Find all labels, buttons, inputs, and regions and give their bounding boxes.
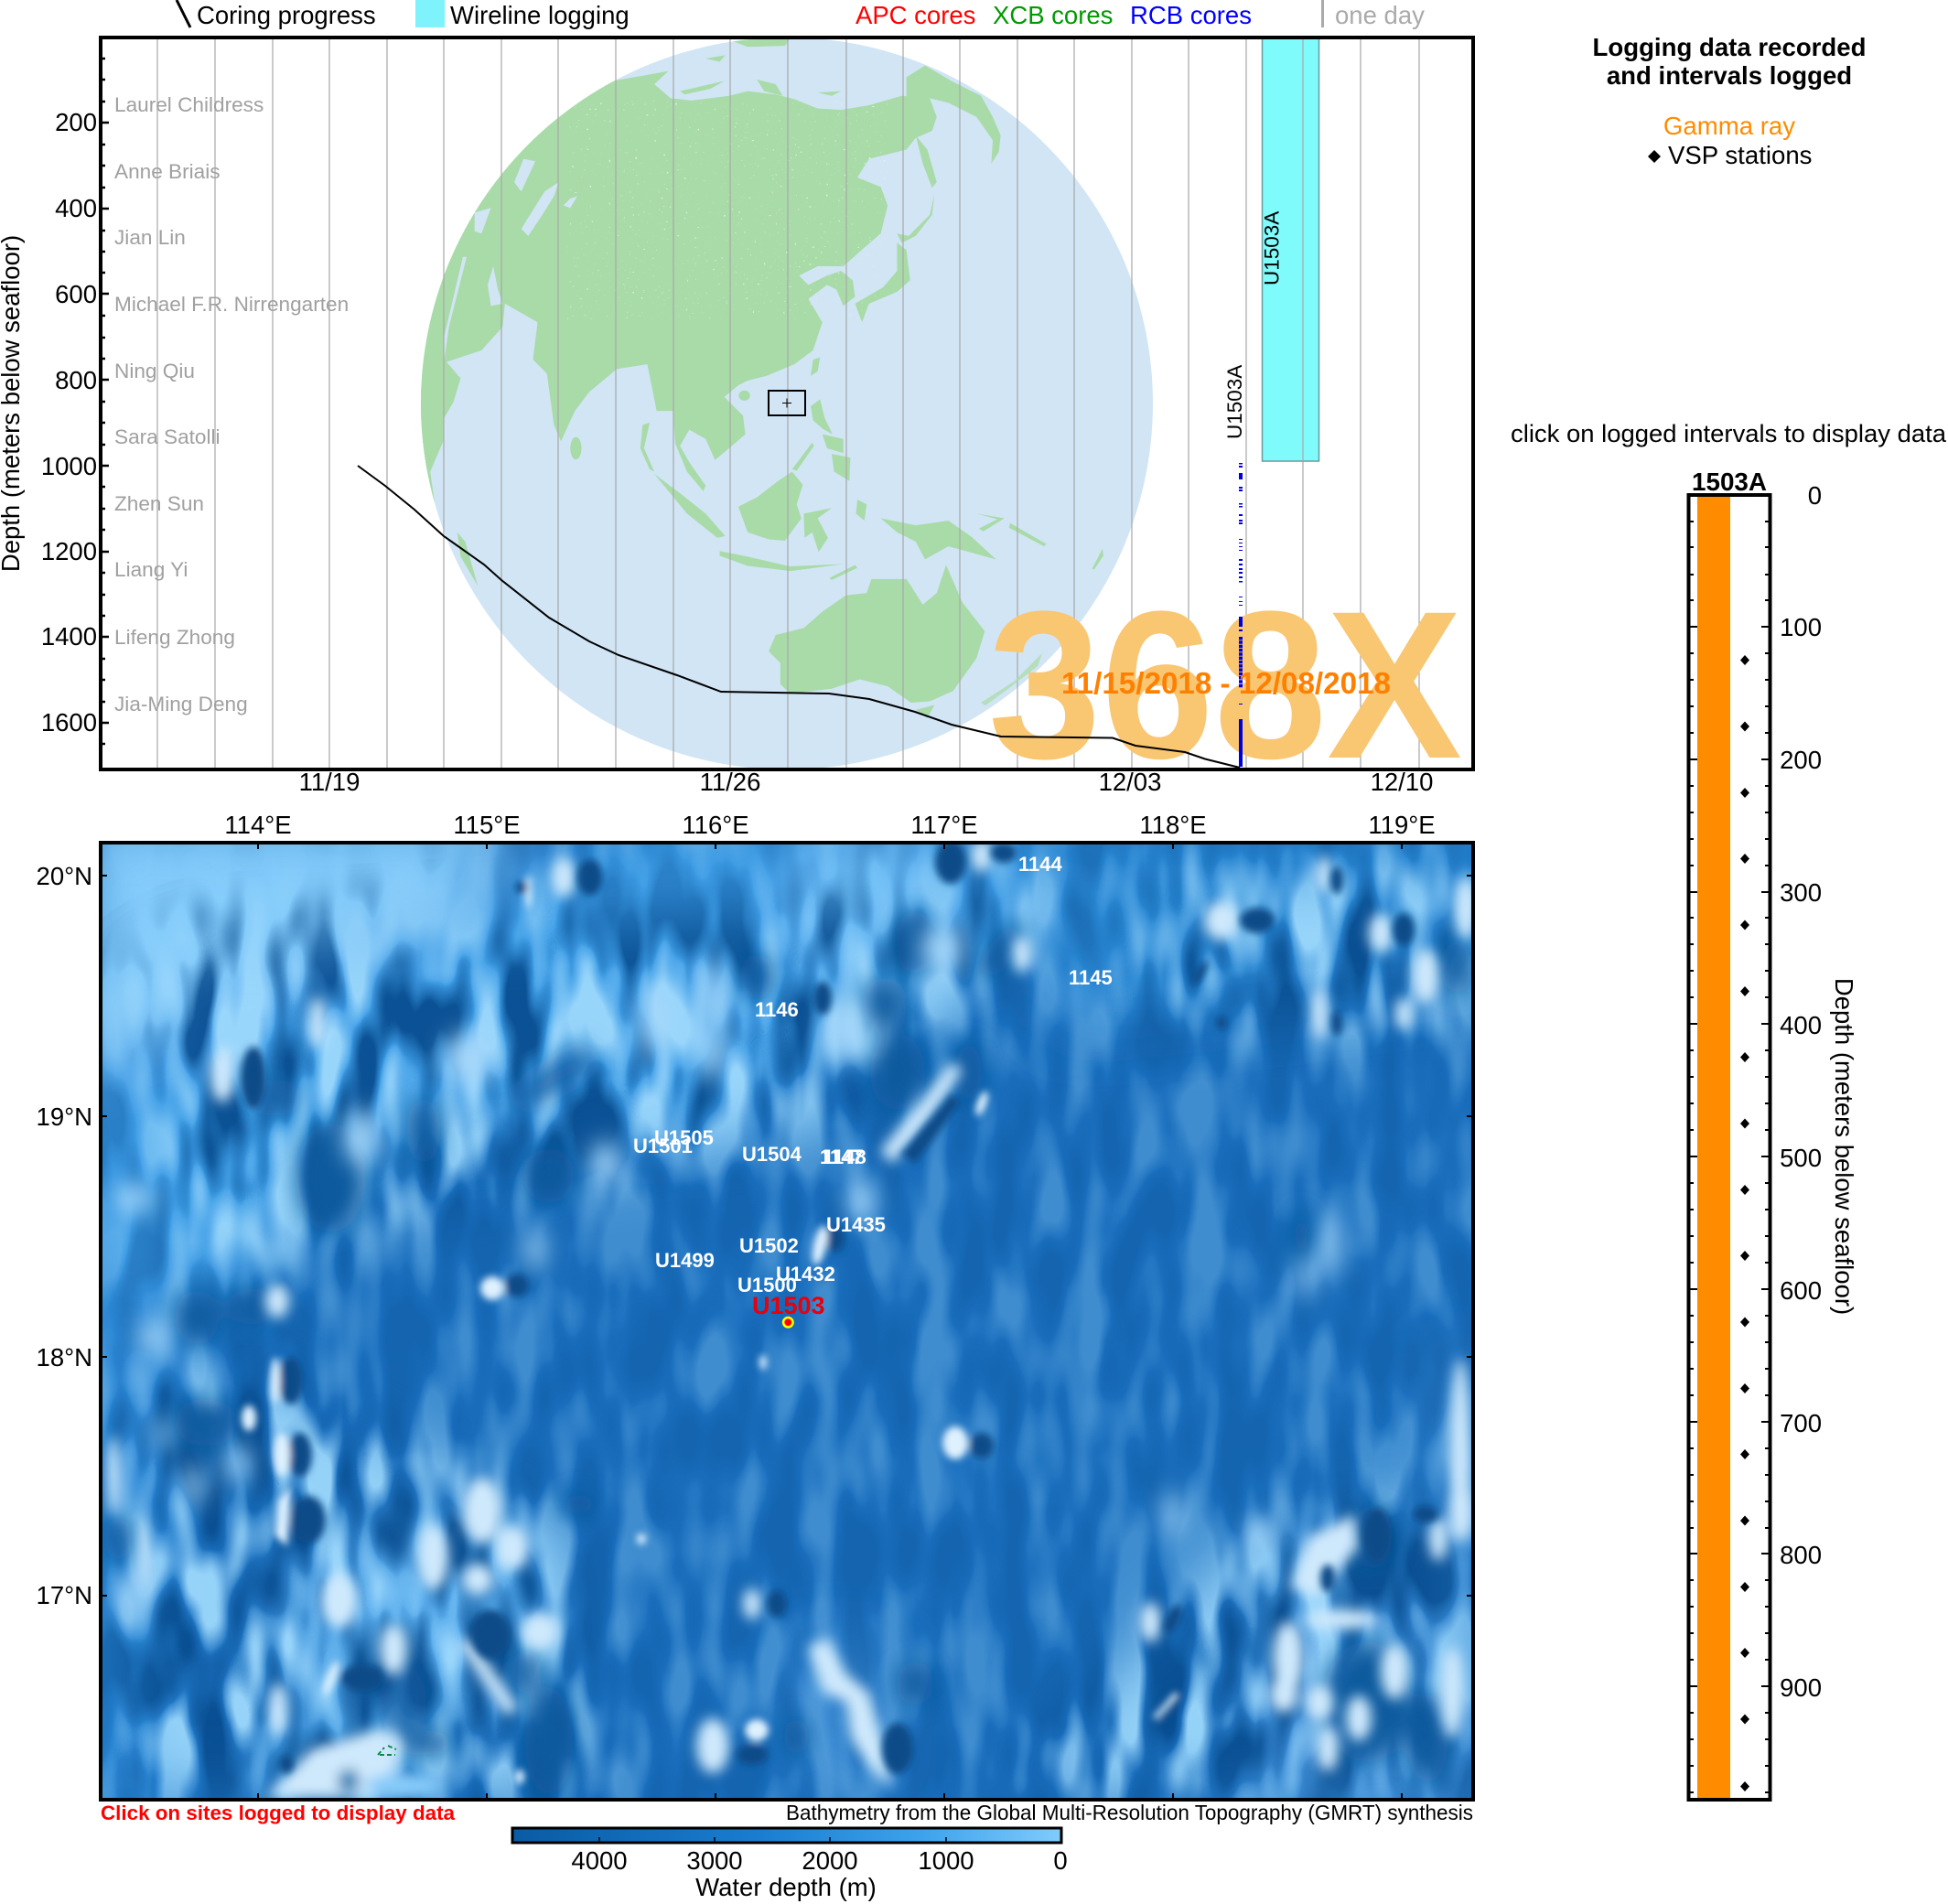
map locator box [769,391,805,415]
colorbar: water depth: 0 [1053,1846,1068,1875]
legend: top row [177,0,1425,29]
legend: XCB cores: XCB cores [993,1,1113,29]
latitude labels: 17°N [37,1581,92,1609]
date axis labels: 12/03 [1099,768,1161,796]
site labels: U1499 [655,1249,715,1272]
label: cored hole: U1503A [1223,365,1246,439]
legend: one day: one day [1335,1,1425,29]
site labels: 1147 [820,1146,864,1168]
expedition dates: 11/15/2018 - 12/08/2018 [1061,666,1391,700]
site labels: U1501 [633,1135,693,1157]
site labels: 1144 [1018,853,1062,876]
longitude labels: 114°E [224,811,292,839]
site labels: U1505 [654,1126,714,1149]
date axis labels: 11/26 [700,768,760,796]
VSP station markers [1740,655,1749,1791]
latitude labels [37,862,92,1609]
latitude labels: 19°N [37,1103,92,1131]
scientist names: Ning Qiu [114,360,195,382]
date axis labels: 11/19 [299,768,360,796]
expedition number 368X: 368X [988,567,1462,802]
track title: 1503A [1692,468,1767,496]
site labels: 1146 [755,998,799,1021]
date axis labels: 12/10 [1371,768,1433,796]
note: click on sites: Click on sites logged to display data [101,1802,456,1824]
latitude labels: 20°N [37,862,92,890]
track depth labels: 500 [1780,1144,1822,1172]
chart frame [101,38,1473,769]
colorbar: water depth [512,1828,1068,1901]
longitude labels [224,811,1436,839]
depth axis labels: 1400 [41,622,97,651]
longitude labels: 115°E [453,811,521,839]
depth axis labels: 1200 [41,537,97,565]
scientist names: Michael F.R. Nirrengarten [114,293,349,316]
instruction: click on logged intervals to display data [1511,420,1947,447]
colorbar: water depth: 2000 [802,1846,858,1875]
track depth labels: 900 [1780,1673,1822,1702]
track depth labels: 400 [1780,1011,1822,1039]
streak texture [101,843,1473,1800]
track depth labels [1780,481,1822,1702]
New Zealand over the number [981,653,1042,705]
depth axis labels: 200 [55,108,97,136]
latitude labels: 18°N [37,1343,92,1372]
icon: small green atoll mark [378,1746,396,1755]
active site marker [783,1318,792,1328]
scientist names [114,93,349,715]
scientist names: Sara Satolli [114,425,221,448]
depth axis labels: 400 [55,194,97,222]
legend: VSP stations: VSP stations [1668,141,1812,169]
depth axis labels: 1000 [41,452,97,480]
track ticks [1688,522,1770,1792]
track axis title: Depth (meters below seafloor) [1830,978,1858,1315]
longitude labels: 118°E [1139,811,1207,839]
RCB core marks [1239,463,1243,767]
site labels: 1148 [823,1146,866,1168]
site labels: U1432 [776,1263,835,1285]
label: logging hole: U1503A [1261,211,1283,285]
map frame [101,843,1473,1800]
globe map [393,38,1153,769]
panel: bathymetry map [73,814,1501,1830]
site labels: U1500 [737,1274,797,1296]
land speckle [572,105,883,316]
depth axis ticks [101,59,109,744]
heading: logging data [1593,33,1866,90]
legend: wireline logging: Wireline logging [450,1,630,29]
legend: RCB cores: RCB cores [1130,1,1252,29]
longitude labels: 117°E [910,811,978,839]
map ticks [101,843,1473,1800]
coring progress line [358,466,1240,768]
track depth labels: 600 [1780,1276,1822,1305]
depth axis labels: 800 [55,366,97,394]
colorbar: water depth: 1000 [918,1846,974,1875]
active site label: U1503 [752,1292,825,1319]
bathymetry credit: Bathymetry from the Global Multi-Resolution Topography (GMRT) synthesis [786,1801,1473,1824]
site labels: U1504 [742,1143,802,1166]
date axis labels [299,768,1433,796]
site labels: U1502 [739,1234,799,1257]
longitude labels: 119°E [1368,811,1436,839]
depth axis labels [41,108,97,737]
scientist names: Zhen Sun [114,492,204,515]
longitude labels: 116°E [682,811,749,839]
heading: logging data: Logging data recorded [1593,33,1866,61]
track depth labels: 300 [1780,878,1822,907]
gamma ray interval [1697,495,1730,1800]
legend: coring progress: Coring progress [197,1,376,29]
track depth labels: 800 [1780,1541,1822,1569]
panel: coring timeline chart [0,38,1473,802]
scientist names: Lifeng Zhong [114,626,235,649]
depth axis labels: 1600 [41,708,97,737]
scientist names: Jia-Ming Deng [114,693,248,715]
legend: gamma ray: Gamma ray [1663,112,1795,140]
scientist names: Laurel Childress [114,93,264,116]
legend: APC cores: APC cores [856,1,975,29]
colorbar: water depth: 4000 [571,1846,628,1875]
scientist names: Anne Briais [114,160,221,183]
site labels: U1435 [826,1213,886,1236]
track depth labels: 200 [1780,746,1822,774]
track depth labels: 700 [1780,1409,1822,1437]
panel: logged interval track [1688,468,1858,1800]
heading: logging data: and intervals logged [1607,61,1852,90]
scientist names: Liang Yi [114,558,188,581]
colorbar: water depth: Water depth (m) [695,1873,877,1901]
scientist names: Jian Lin [114,226,186,249]
colorbar: water depth: 3000 [686,1846,743,1875]
site labels [633,853,1113,1296]
track depth labels: 100 [1780,613,1822,641]
track frame [1689,495,1770,1800]
track depth labels: 0 [1808,481,1822,510]
day gridlines [157,39,1419,768]
depth axis labels: 600 [55,280,97,308]
site labels: 1145 [1069,966,1113,989]
logging interval bar [1263,38,1319,461]
